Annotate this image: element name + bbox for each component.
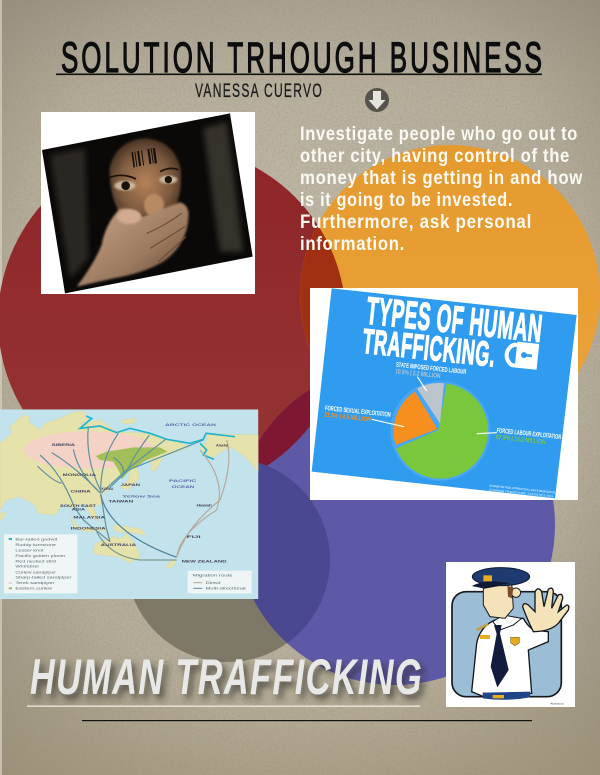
map labels: Alaska bbox=[216, 444, 229, 448]
dark curtains bbox=[50, 122, 243, 278]
body text: Furthermore, ask personal bbox=[300, 211, 532, 233]
heading: human trafficking: HUMAN TRAFFICKING bbox=[30, 649, 423, 705]
map labels: JAPAN bbox=[121, 483, 141, 487]
label: forced sexual: FORCED SEXUAL EXPLOITATION bbox=[325, 405, 391, 419]
belt bbox=[483, 692, 530, 700]
circle: orange bbox=[300, 145, 600, 445]
face bbox=[109, 138, 181, 218]
eyes bbox=[114, 181, 136, 190]
map: migration routes bbox=[0, 409, 258, 599]
overlap: grey and purple bbox=[253, 462, 330, 643]
migration routes bbox=[37, 427, 203, 560]
panel: types of human trafficking chart bbox=[310, 288, 578, 500]
route legend: Multi-directional bbox=[206, 587, 246, 591]
face bbox=[483, 583, 513, 618]
overlap: red and orange bbox=[300, 225, 343, 348]
label: forced labour bbox=[496, 427, 561, 448]
pie slice: forced labour bbox=[396, 384, 488, 479]
species legend: Lesser knot bbox=[15, 548, 45, 552]
chart heading bbox=[361, 290, 545, 379]
blue backdrop bbox=[452, 592, 561, 697]
species legend: Terek sandpiper bbox=[15, 581, 55, 585]
coastline highlight bbox=[80, 416, 235, 459]
route legend: Direct bbox=[206, 581, 222, 585]
map labels: TAIWAN bbox=[108, 499, 134, 503]
map: migration routes: ARCTIC OCEAN bbox=[165, 423, 217, 427]
source note bbox=[489, 484, 555, 499]
route legend bbox=[188, 571, 252, 593]
label: state imposed: 10.5% | 2.2 MILLION bbox=[395, 368, 441, 380]
watermark: #justacop bbox=[551, 702, 564, 706]
species legend: Sharp-tailed sandpiper bbox=[15, 576, 72, 580]
title underline bbox=[56, 74, 542, 75]
overlap: red and purple bbox=[258, 390, 310, 466]
badges bbox=[511, 637, 519, 646]
species legend: Red necked stint bbox=[15, 559, 57, 563]
hand bbox=[77, 202, 189, 287]
body text: information. bbox=[300, 233, 405, 255]
body text: is it going to be invested. bbox=[300, 189, 513, 211]
pie slice: forced sexual exploitation bbox=[394, 392, 437, 445]
map: migration routes: Yellow Sea bbox=[122, 494, 162, 498]
blue tilted poster bbox=[312, 288, 577, 498]
uniform bbox=[472, 618, 548, 697]
footer rule: black bbox=[82, 720, 532, 721]
label: state imposed bbox=[395, 362, 467, 383]
source note: © HUMAN TRAFFICKING STATISTICS 2014 bbox=[489, 488, 554, 498]
route legend: Migration route bbox=[193, 574, 233, 578]
map labels: MONGOLIA bbox=[63, 473, 97, 477]
map labels: FIJI bbox=[187, 535, 201, 539]
species legend: Pacific golden plover bbox=[15, 554, 66, 558]
sea bbox=[0, 409, 258, 599]
pie chart bbox=[390, 381, 490, 481]
map labels: Hawaii bbox=[197, 504, 212, 508]
barcode bbox=[131, 148, 157, 168]
species legend: Ruddy turnstone bbox=[15, 543, 56, 547]
map labels: AUSTRALIA bbox=[101, 543, 137, 547]
map labels: MALAYSIA bbox=[73, 515, 106, 519]
map labels: CHINA bbox=[71, 489, 91, 493]
author name: VANESSA CUERVO bbox=[195, 81, 323, 102]
panel: police officer illustration bbox=[446, 562, 575, 707]
species legend bbox=[4, 534, 77, 593]
circle: grey bbox=[126, 458, 330, 662]
direct route arcs bbox=[177, 440, 229, 557]
species legend: Bar-tailed godwit bbox=[15, 537, 59, 541]
circle: red bbox=[0, 146, 346, 494]
icon: down arrow bbox=[365, 88, 389, 112]
map labels: ASIA bbox=[72, 507, 86, 511]
cap bbox=[472, 568, 530, 586]
map labels: SOUTH EAST bbox=[60, 504, 97, 508]
heading underline: white bbox=[27, 706, 420, 707]
map: migration routes: OCEAN bbox=[172, 485, 195, 489]
map labels bbox=[52, 443, 229, 564]
species legend: Eastern curlew bbox=[15, 586, 52, 590]
map labels: KOREA bbox=[102, 487, 114, 491]
nose bbox=[144, 194, 164, 216]
range: pink breeding area bbox=[24, 431, 155, 469]
label: forced labour: 67.9% | 14.2 MILLION bbox=[496, 434, 546, 446]
collar bbox=[493, 615, 522, 630]
map: migration routes: PACIFIC bbox=[169, 479, 197, 483]
species legend: Whimbrel bbox=[15, 565, 39, 569]
pie slice: state imposed bbox=[417, 383, 444, 423]
label: state imposed: STATE IMPOSED FORCED LABOUR bbox=[396, 362, 467, 376]
photo: trafficking victim with barcode bbox=[41, 112, 255, 294]
body text bbox=[300, 123, 583, 255]
species legend: Curlew sandpiper bbox=[15, 570, 57, 574]
callout lines bbox=[372, 377, 497, 434]
icon: padlock bbox=[505, 341, 539, 370]
raised hand bbox=[523, 588, 569, 632]
label: forced sexual: 21.5% | 4.5 MILLION bbox=[324, 412, 371, 424]
circle: purple bbox=[235, 365, 555, 685]
tie bbox=[491, 625, 509, 687]
label: forced sexual bbox=[324, 405, 391, 426]
map labels: SIBERIA bbox=[52, 443, 76, 447]
map labels: NEW ZEALAND bbox=[182, 560, 227, 564]
land masses bbox=[0, 412, 258, 568]
source note: INFORMATION FROM: INTERNATIONAL LABOUR ORGANIZATION bbox=[489, 484, 555, 495]
map labels: INDONESIA bbox=[71, 526, 106, 530]
range: green breeding area bbox=[96, 447, 168, 479]
overlapping colour circles bbox=[0, 145, 600, 685]
